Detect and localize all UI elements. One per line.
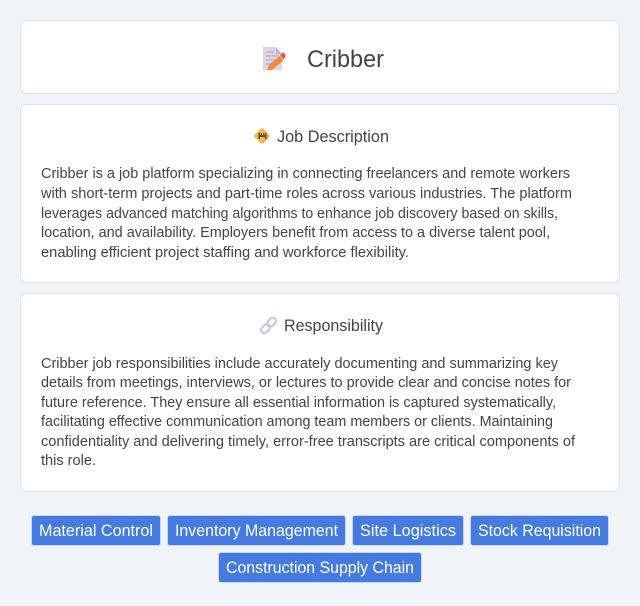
panel: title card (20, 20, 620, 94)
tag: Site Logistics (352, 516, 464, 546)
text block: job description: with short-term projects and part-time roles across various industries. The platform (40, 186, 572, 202)
text block: job description (40, 166, 572, 261)
heading: responsibility: Responsibility (284, 317, 384, 335)
text block: job description: Cribber is a job platform specializing in connecting freelancers and remote workers (41, 166, 570, 182)
text block: responsibility: facilitating effective communication among team members or clients. Maintaining (41, 414, 553, 430)
text block: job description: leverages advanced matching algorithms to enhance job discovery based on skills, (41, 206, 558, 222)
tag: Construction Supply Chain (218, 552, 422, 582)
text block: responsibility (41, 356, 576, 469)
tag: Stock Requisition (470, 516, 608, 546)
icon: document with pencil (263, 47, 286, 70)
heading: job description: Job Description (277, 128, 389, 146)
text block: responsibility: details from meetings, interviews, or lectures to provide clear and concise notes for (41, 375, 571, 391)
text block: job description: enabling efficient project staffing and workforce flexibility. (41, 245, 409, 261)
tag: Inventory Management (168, 516, 346, 546)
tag: Material Control: Material Control (39, 522, 153, 540)
icon: job diamond (254, 128, 270, 144)
icon: chain link (260, 316, 277, 335)
panel: job description (20, 104, 620, 282)
tag: Site Logistics: Site Logistics (360, 522, 456, 540)
panel: responsibility (20, 294, 620, 492)
title: Cribber (307, 46, 384, 73)
tag: Stock Requisition: Stock Requisition (478, 522, 601, 540)
tag: Material Control (32, 516, 160, 546)
text block: responsibility: Cribber job responsibilities include accurately documenting and summarizing key (41, 356, 559, 372)
text block: responsibility: future reference. They ensure all essential information is captured systematically, (41, 395, 556, 411)
text block: job description: location, and availability. Employers benefit from access to a diverse talent pool, (41, 225, 550, 241)
tag: Construction Supply Chain: Construction Supply Chain (226, 559, 414, 577)
tag: Inventory Management: Inventory Management (175, 522, 338, 540)
text block: responsibility: this role. (41, 453, 96, 469)
text block: responsibility: confidentiality and delivering timely, error-free transcripts are critical components of (41, 434, 576, 450)
